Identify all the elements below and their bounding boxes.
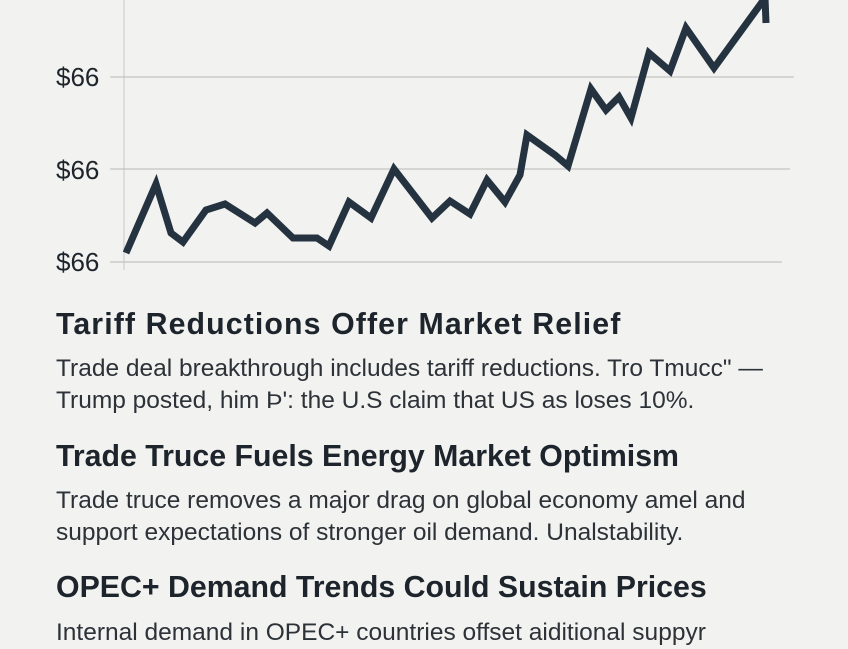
text 1 (56, 355, 763, 414)
text 1: Trump posted, him Þ': the U.S claim that US as loses 10%. (56, 387, 694, 414)
text 1: Trade deal breakthrough includes tariff reductions. Tro Tmucc" — (56, 355, 763, 382)
text 2 (56, 487, 746, 546)
y labels: $66 (56, 62, 99, 92)
chart: $66 (56, 247, 99, 277)
price line (126, 0, 766, 253)
heading 1: Tariff Reductions Offer Market Relief (56, 308, 621, 341)
text 3: Internal demand in OPEC+ countries offset aiditional suppyr (56, 619, 706, 646)
heading 3: OPEC+ Demand Trends Could Sustain Prices (56, 571, 707, 604)
text 2: support expectations of stronger oil demand. Unalstability. (56, 519, 683, 546)
text 2: Trade truce removes a major drag on global economy amel and (56, 487, 746, 514)
chart: $66 (56, 155, 99, 185)
heading 2: Trade Truce Fuels Energy Market Optimism (56, 440, 679, 473)
chart (56, 0, 794, 277)
